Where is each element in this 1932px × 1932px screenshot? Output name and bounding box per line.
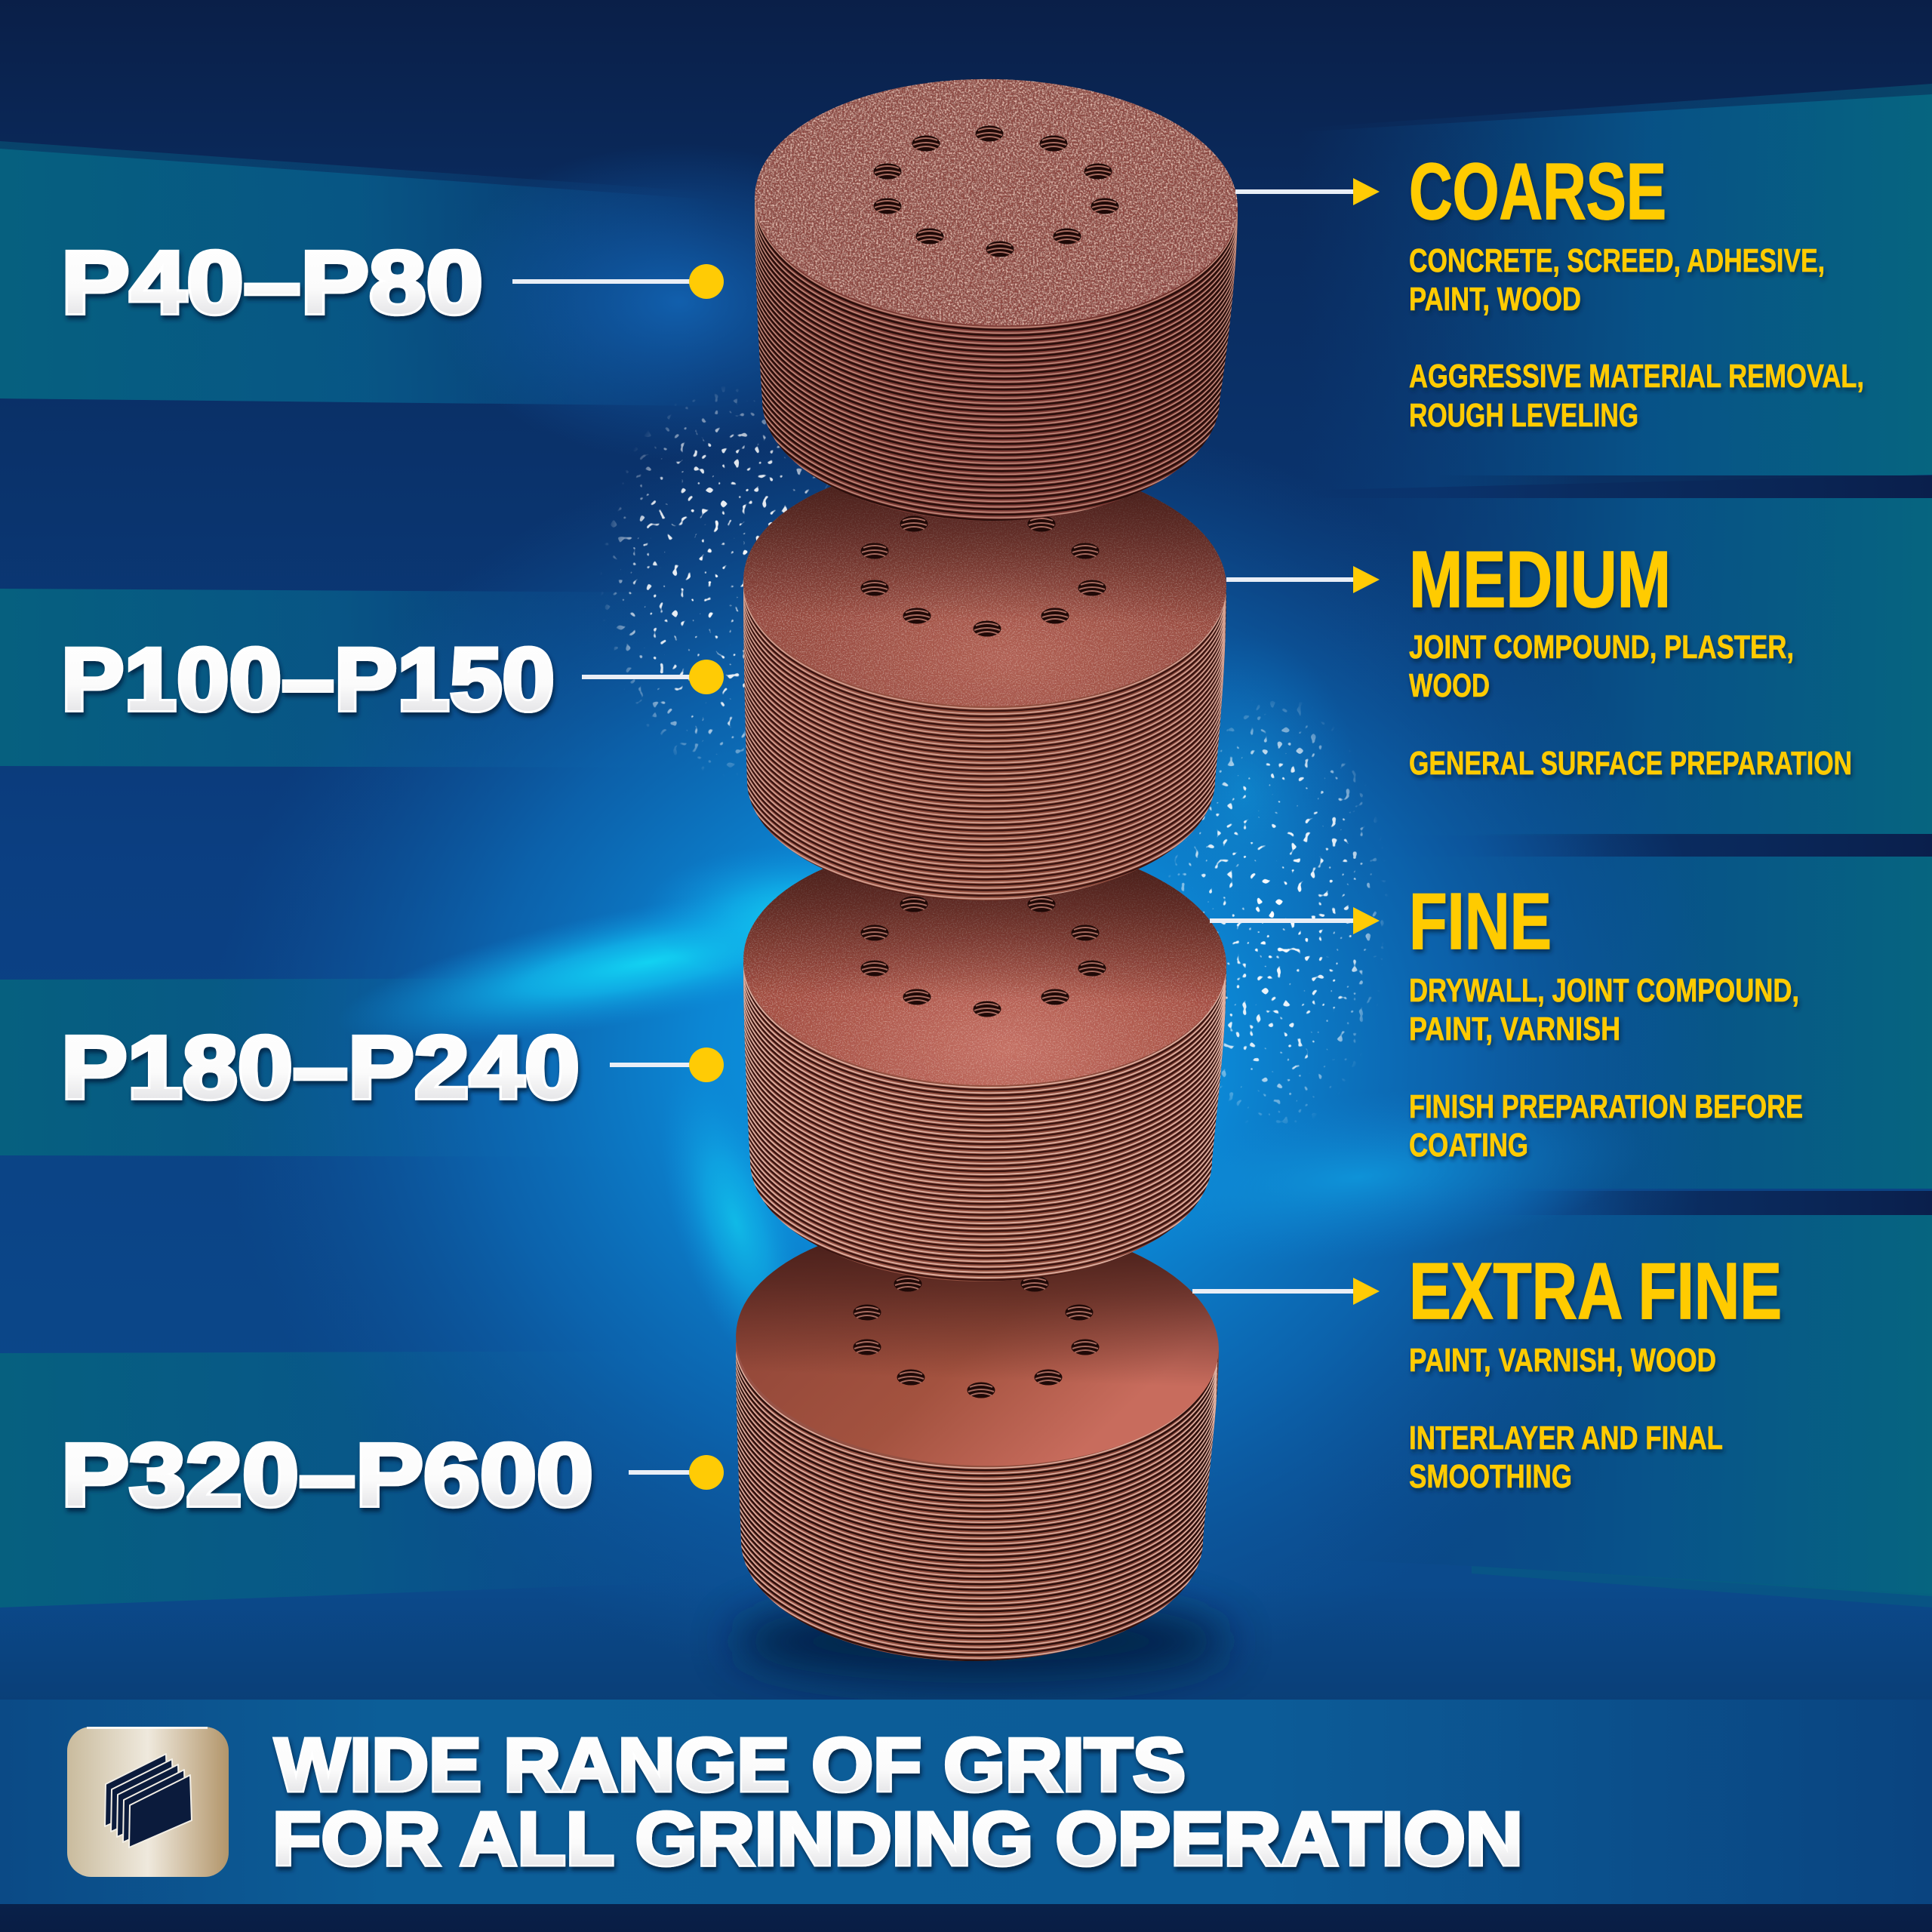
text block: medium: MEDIUM	[1409, 535, 1671, 624]
left bands	[0, 141, 717, 1607]
text block: fine: FINE	[1409, 877, 1552, 966]
arrow: coarse	[1235, 178, 1380, 205]
arrow: medium	[1226, 566, 1380, 593]
label: P320–P600: P320–P600	[61, 1426, 593, 1525]
text block: coarse: COARSE	[1409, 147, 1666, 236]
text block: fine: COATING	[1409, 1127, 1528, 1164]
text block: medium: JOINT COMPOUND, PLASTER,	[1409, 629, 1794, 666]
text block: extra fine: EXTRA FINE	[1409, 1247, 1782, 1336]
text block: coarse: PAINT, WOOD	[1409, 281, 1581, 318]
text block: extra fine	[1409, 1247, 1782, 1495]
text block: fine	[1409, 877, 1803, 1164]
label: P40–P80: P40–P80	[61, 233, 483, 333]
bottom banner	[0, 1700, 1932, 1904]
label: P100–P150: P100–P150	[61, 630, 555, 730]
fine disc stack	[743, 869, 1226, 1281]
label: P180–P240: P180–P240	[61, 1018, 580, 1118]
text block: extra fine: SMOOTHING	[1409, 1458, 1572, 1495]
banner heading	[272, 1723, 1523, 1881]
bottom shadow of stack	[732, 1600, 1230, 1683]
text block: fine: PAINT, VARNISH	[1409, 1011, 1620, 1048]
label: P40–P80	[61, 233, 724, 333]
banner heading: FOR ALL GRINDING OPERATION	[272, 1797, 1523, 1881]
banner heading: WIDE RANGE OF GRITS	[275, 1723, 1186, 1807]
text block: extra fine: INTERLAYER AND FINAL	[1409, 1420, 1723, 1457]
text block: medium: WOOD	[1409, 667, 1490, 704]
text block: coarse	[1409, 147, 1864, 434]
arrow: fine	[1210, 907, 1380, 934]
dust particles: left cloud	[600, 385, 857, 777]
dust particles: right cloud	[1162, 694, 1389, 1132]
right bands	[1298, 84, 1932, 1607]
medium disc stack	[743, 486, 1226, 900]
arrow: extra fine	[1192, 1278, 1380, 1305]
text block: fine: FINISH PREPARATION BEFORE	[1409, 1088, 1803, 1125]
coarse disc stack	[746, 73, 1241, 531]
central glow	[211, 143, 1721, 1706]
text block: medium	[1409, 535, 1852, 782]
text block: fine: DRYWALL, JOINT COMPOUND,	[1409, 972, 1799, 1009]
text block: extra fine: PAINT, VARNISH, WOOD	[1409, 1342, 1716, 1379]
text block: coarse: ROUGH LEVELING	[1409, 397, 1638, 434]
icon: stacked sanding sheets	[67, 1727, 229, 1877]
extra fine disc stack	[736, 1246, 1219, 1661]
